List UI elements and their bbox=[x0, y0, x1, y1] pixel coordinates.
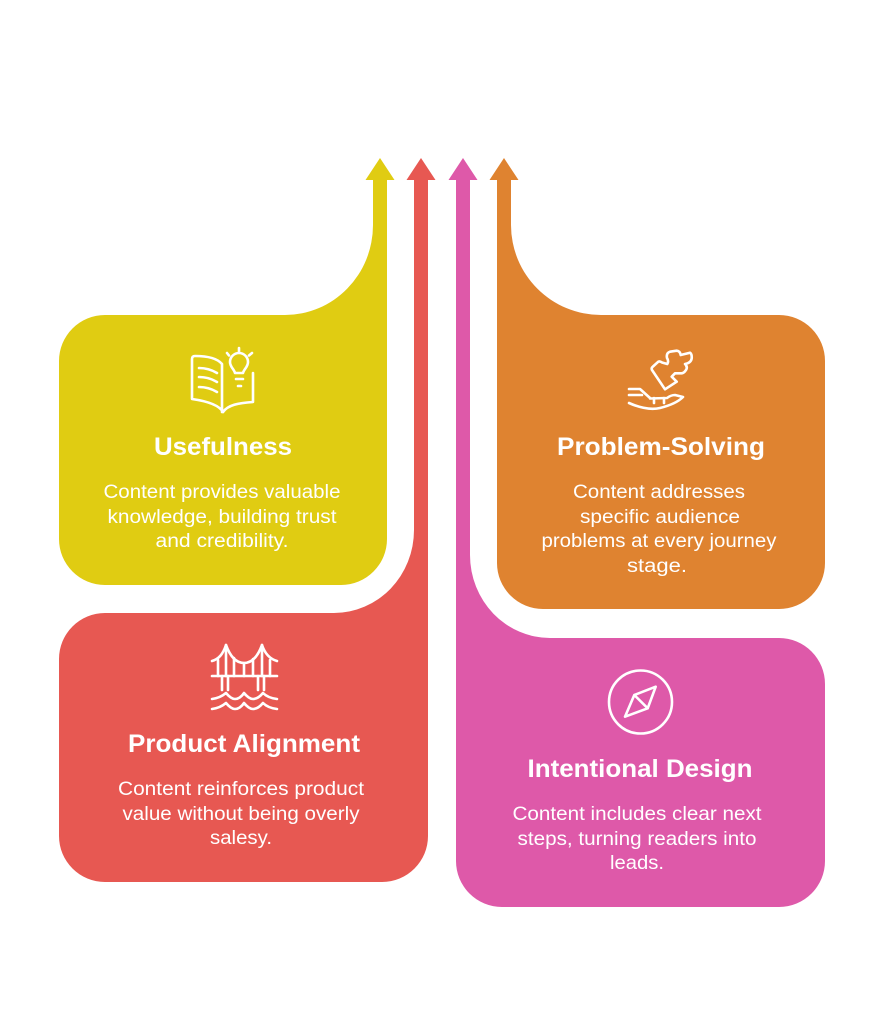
body text bbox=[118, 779, 365, 849]
red card with arrow bbox=[59, 158, 436, 882]
body text: Content includes clear next bbox=[512, 804, 762, 825]
body text: specific audience bbox=[580, 507, 740, 528]
panel: product alignment bbox=[59, 158, 436, 882]
heading: Intentional Design bbox=[528, 755, 752, 783]
heading: Problem-Solving bbox=[557, 433, 765, 461]
icon: open book with light bulb bbox=[192, 348, 253, 412]
body text: and credibility. bbox=[156, 531, 288, 552]
orange card with arrow bbox=[490, 158, 825, 609]
body text: knowledge, building trust bbox=[108, 507, 337, 528]
body text: Content addresses bbox=[573, 482, 745, 503]
body text bbox=[104, 482, 340, 552]
body text: salesy. bbox=[210, 828, 272, 849]
pink card with arrow bbox=[448, 158, 825, 907]
panel: intentional design bbox=[448, 158, 825, 907]
body text: problems at every journey bbox=[542, 531, 777, 552]
icon: compass bbox=[609, 670, 672, 734]
body text: leads. bbox=[610, 853, 664, 874]
body text bbox=[512, 804, 762, 874]
panel: usefulness bbox=[59, 158, 394, 585]
body text: Content reinforces product bbox=[118, 779, 365, 800]
heading: Usefulness bbox=[154, 433, 292, 461]
panel: problem-solving bbox=[490, 158, 825, 609]
heading: Product Alignment bbox=[128, 730, 361, 758]
icon: bridge bbox=[212, 645, 277, 709]
icon: puzzle piece on hand bbox=[629, 351, 692, 409]
body text: steps, turning readers into bbox=[518, 829, 756, 850]
body text: stage. bbox=[627, 556, 687, 577]
body text bbox=[542, 482, 777, 577]
body text: Content provides valuable bbox=[104, 482, 340, 503]
body text: value without being overly bbox=[122, 804, 360, 825]
yellow card with arrow bbox=[59, 158, 394, 585]
